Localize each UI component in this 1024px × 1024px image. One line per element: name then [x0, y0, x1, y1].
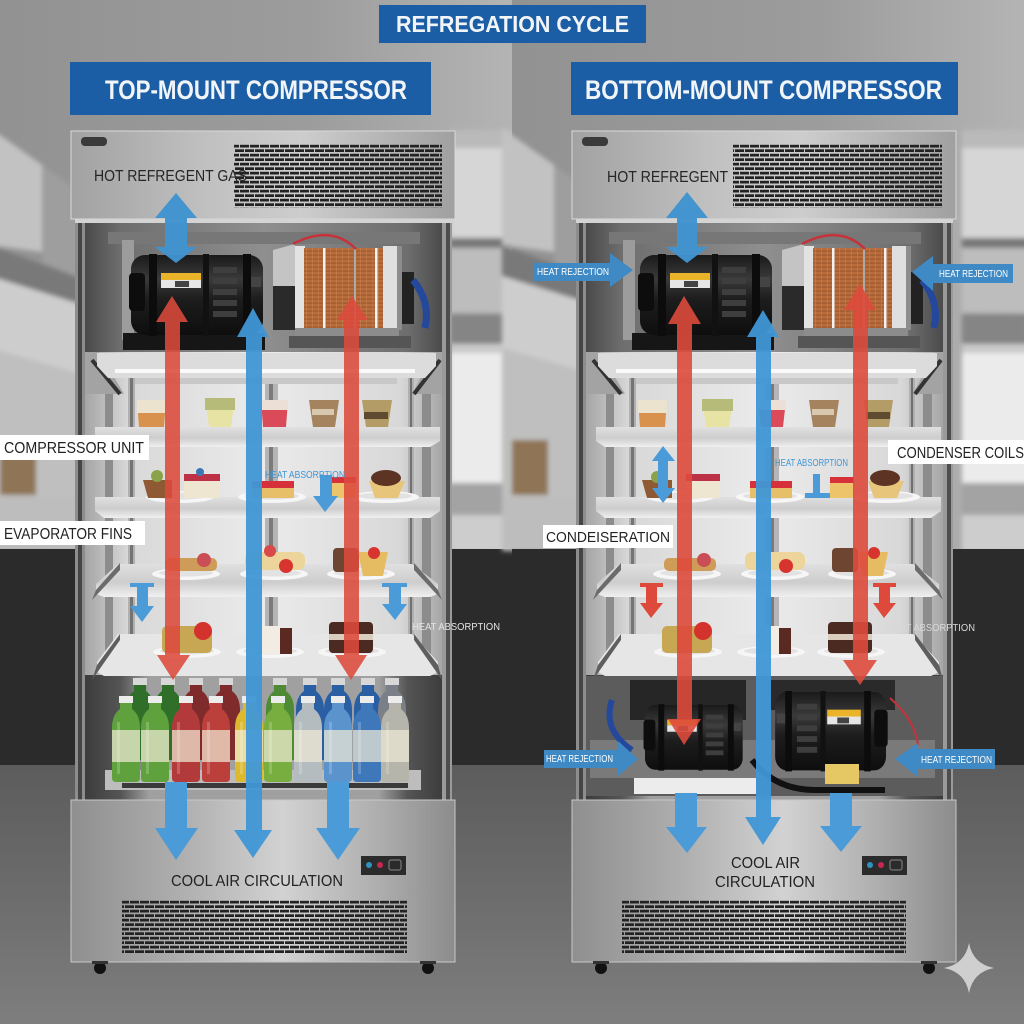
arrow: left top double blue	[155, 193, 197, 263]
label: heat absorption left blue: HEAT ABSORPTION	[265, 470, 345, 481]
shelf food: right cups row	[638, 399, 893, 427]
label: condeiseration: CONDEISERATION	[546, 529, 670, 546]
label: hot refregent: HOT REFREGENT	[607, 169, 728, 186]
label: condeiseration	[543, 525, 673, 548]
arrow: right long red 2	[843, 284, 877, 685]
label: heat absorption right blue: HEAT ABSORPTION	[775, 458, 848, 469]
callout: heat rejection bottom left	[544, 741, 638, 776]
vent: left bottom	[122, 899, 407, 953]
bottles: left lower compartment	[105, 678, 421, 790]
arrow: left small down 2	[382, 583, 407, 620]
arrow: right long blue centre	[745, 310, 781, 845]
heading: bottom-mount compressor	[571, 62, 958, 115]
label: compressor unit: COMPRESSOR UNIT	[4, 440, 144, 457]
arrow: right small red down 2	[873, 583, 896, 618]
label: hot refregent gas: HOT REFREGENT GAS	[94, 168, 247, 185]
shelf food: left cups row	[137, 398, 392, 427]
callout: heat rejection bottom left: HEAT REJECTION	[546, 754, 613, 765]
arrow: left long red 2	[335, 296, 368, 680]
title: refregation cycle: REFREGATION CYCLE	[396, 11, 629, 37]
label: cool air circulation right	[715, 855, 815, 891]
callout: heat rejection bottom right: HEAT REJECTION	[921, 755, 992, 766]
arrow: right small double blue	[652, 446, 675, 503]
arrow: left small down 1	[130, 583, 154, 622]
arrow: left cool air down 1	[155, 782, 198, 860]
shelf food: right row two	[642, 470, 920, 503]
arrow: left cool air down 2	[316, 782, 360, 860]
title: refregation cycle	[379, 5, 646, 43]
panel: right refrigerator cabinet	[572, 131, 956, 974]
heading: bottom-mount compressor: BOTTOM-MOUNT COMPRESSOR	[585, 75, 942, 105]
callout: heat rejection bottom right	[895, 743, 995, 777]
label: condenser coils	[888, 440, 1024, 464]
heading: top-mount compressor	[70, 62, 431, 115]
shelf food: right row three	[653, 547, 896, 580]
vent: right bottom	[622, 899, 906, 953]
label: compressor unit	[0, 435, 149, 460]
arrow: right cool air down 2	[820, 793, 862, 852]
label: cool air circulation right: COOL AIR	[731, 855, 800, 872]
label: heat absorption right side: HEAT ABSORPTION	[887, 623, 975, 634]
shelf food: right row four	[654, 622, 885, 658]
shelf food: left row two	[143, 468, 419, 503]
callout: heat rejection top left	[533, 253, 633, 287]
right lower compartment: two bottom-mount compressors	[586, 676, 943, 796]
label: evaporator fins	[0, 521, 145, 545]
arrow: right heat absorption marker	[805, 474, 830, 498]
icon: left compressor unit	[123, 254, 265, 350]
label: cool air circulation left: COOL AIR CIRCULATION	[171, 873, 343, 890]
callout: heat rejection top right	[912, 256, 1013, 291]
arrow: right long red 1	[668, 296, 701, 745]
arrow: left long red 1	[156, 296, 190, 680]
icon: left condenser coil	[273, 235, 426, 348]
background: right kitchen scene	[502, 0, 1024, 1024]
arrow: left long blue centre	[234, 308, 272, 858]
arrow: right cool air down 1	[666, 793, 707, 853]
arrow: left heat absorption down centre	[313, 475, 338, 512]
background: left kitchen scene	[0, 0, 516, 1024]
vent: left top	[234, 144, 442, 208]
arrow: right top double blue	[666, 192, 708, 263]
icon: right condenser coil	[782, 235, 936, 348]
label: evaporator fins: EVAPORATOR FINS	[4, 526, 132, 543]
shelf food: left row four	[153, 622, 386, 658]
label: cool air circulation right: CIRCULATION	[715, 874, 815, 891]
shelf food: left row three	[152, 545, 395, 580]
vent: right top	[733, 144, 942, 208]
icon: right compressor unit	[632, 254, 774, 350]
heading: top-mount compressor: TOP-MOUNT COMPRESSOR	[105, 75, 407, 105]
callout: heat rejection top right: HEAT REJECTION	[939, 269, 1008, 280]
callout: heat rejection top left: HEAT REJECTION	[537, 267, 609, 278]
icon: sparkle watermark	[944, 943, 994, 993]
arrow: right small red down 1	[640, 583, 663, 618]
panel: left refrigerator cabinet	[71, 131, 455, 974]
label: heat absorption left side: HEAT ABSORPTION	[412, 622, 500, 633]
